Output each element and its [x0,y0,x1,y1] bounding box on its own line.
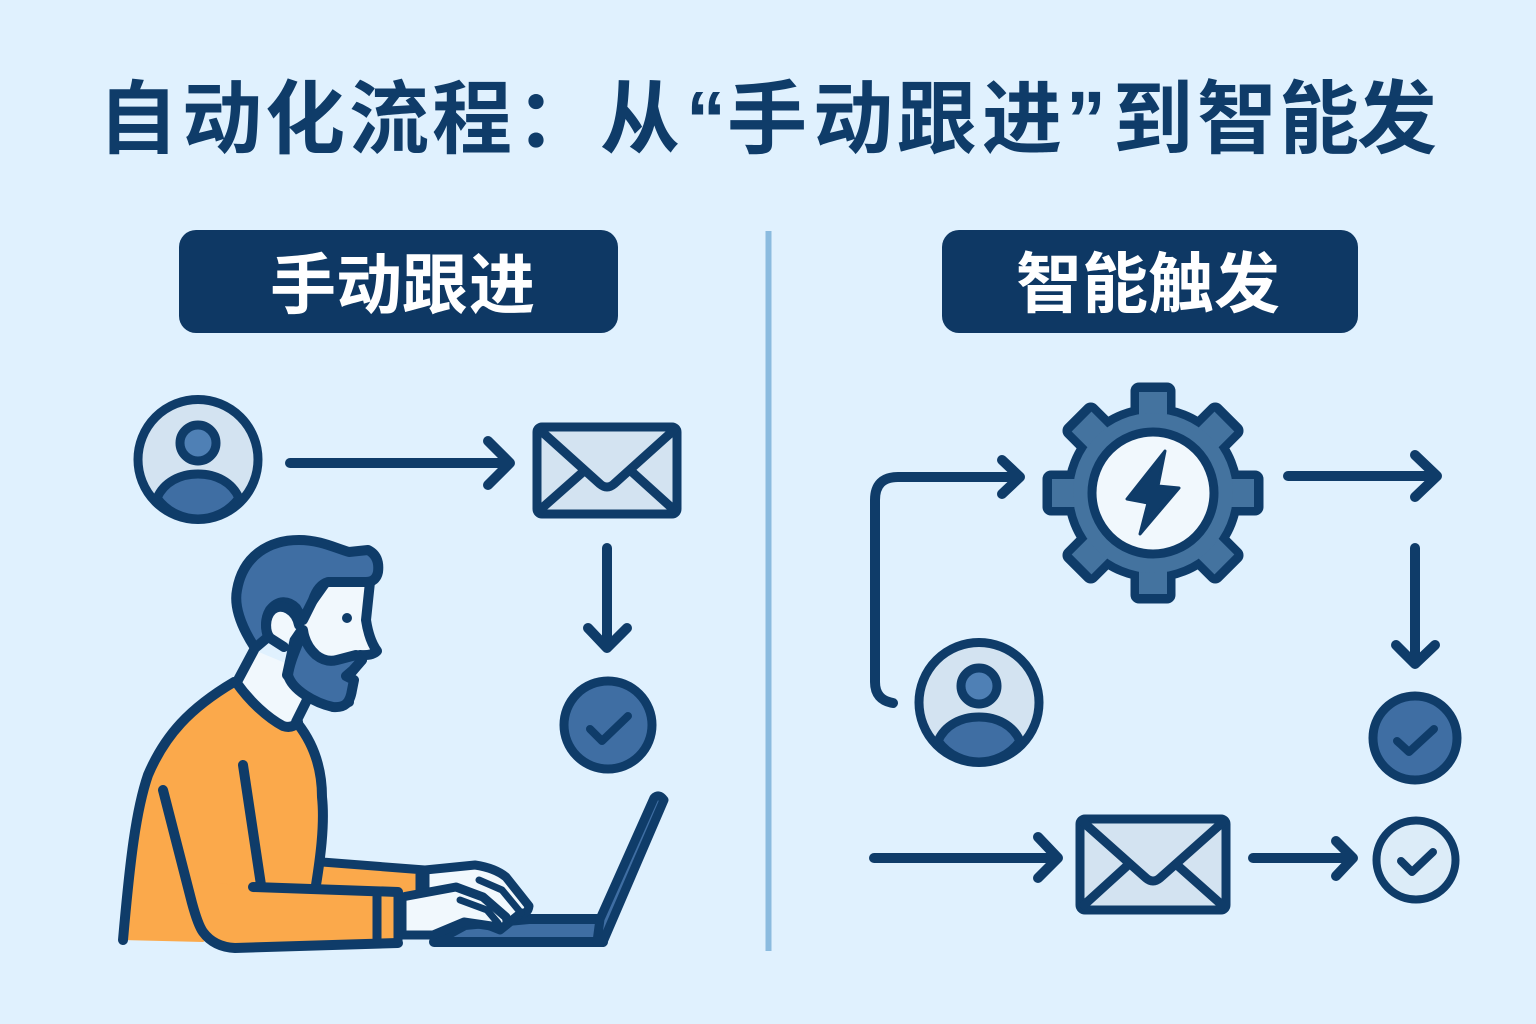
icon: user left [138,400,258,520]
icon: check outline right [1376,820,1456,900]
icon: gear with lightning [1047,387,1259,599]
arrow: user to gear [875,460,1020,703]
title: 自动化流程：从“手动跟进”到智能发 [98,75,1437,164]
heading badge: manual: 手动跟进 [270,248,535,322]
arrow: envelope to check [1253,841,1353,876]
panel: manual follow-up [123,230,677,948]
neck [236,650,308,727]
arrow: user to mail [290,441,510,485]
heading badge: manual [179,230,618,333]
torso and arm [123,682,425,948]
icon: check filled right [1373,696,1457,780]
arrow: to envelope [874,837,1058,878]
icon: user right [919,642,1039,762]
head [236,540,378,707]
icon: check left [564,681,652,769]
heading badge: smart [942,230,1358,333]
arrow: down to check [1396,548,1435,664]
panel: smart trigger [874,230,1457,910]
arrow: gear out [1288,455,1437,497]
illustration: man at laptop [123,540,664,948]
arrow: mail to check [588,548,627,648]
laptop [434,796,664,942]
heading badge: smart: 智能触发 [1016,247,1280,321]
divider [766,231,772,951]
hands [402,865,529,935]
icon: envelope left [537,427,677,514]
icon: envelope right [1080,819,1226,910]
